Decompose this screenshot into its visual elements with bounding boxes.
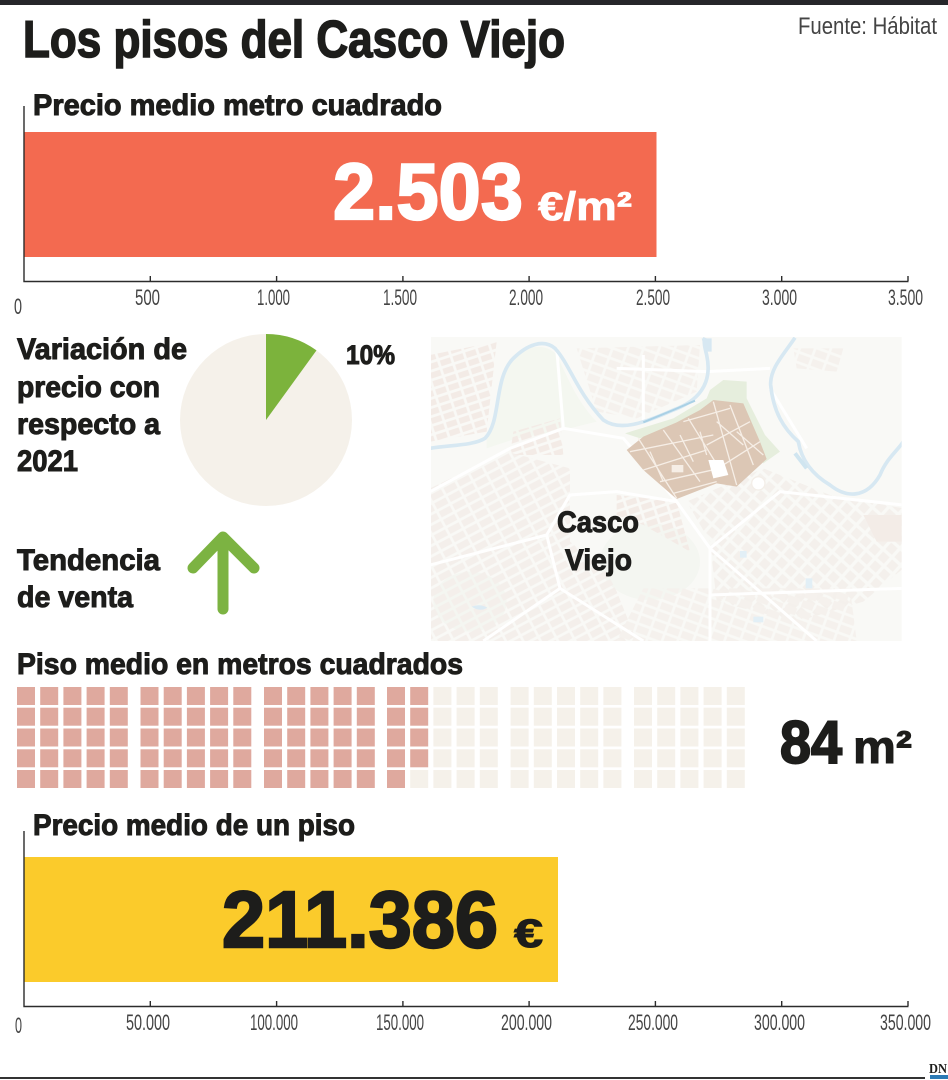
panel: map of Casco Viejo bbox=[430, 335, 903, 643]
green areas bbox=[487, 347, 597, 448]
map bbox=[430, 335, 903, 643]
bar: 211.386 euros: 211.386 bbox=[222, 875, 498, 964]
axis: price per square metre: 0 bbox=[14, 294, 22, 319]
old town streets bbox=[630, 402, 763, 498]
axis: average flat price bbox=[15, 831, 931, 1038]
heading: average flat size: Piso medio en metros cuadrados bbox=[17, 648, 463, 681]
heading: average flat price: Precio medio de un piso bbox=[33, 809, 355, 842]
panel: price variation bbox=[17, 333, 395, 506]
axis: price per square metre: 1.000 bbox=[257, 285, 290, 310]
axis: average flat price: 250.000 bbox=[628, 1010, 678, 1035]
title: Los pisos del Casco Viejo bbox=[23, 11, 565, 69]
white roads bbox=[430, 348, 903, 641]
heading: price per square metre: Precio medio metro cuadrado bbox=[33, 89, 442, 122]
pie label: 10% bbox=[346, 340, 395, 370]
map label bbox=[557, 506, 639, 577]
bar: 211.386 euros: € bbox=[514, 912, 543, 956]
value: 84 square metres bbox=[780, 709, 912, 776]
text: price variation with respect to 2021: precio con bbox=[17, 371, 160, 404]
axis: price per square metre: 1.500 bbox=[383, 285, 417, 310]
axis: average flat price: 0 bbox=[15, 1013, 22, 1038]
footer rule bbox=[0, 1077, 925, 1079]
value: 84 square metres: m² bbox=[853, 721, 912, 773]
axis: average flat price: 300.000 bbox=[754, 1010, 805, 1035]
waffle chart: 84 of 150 squares bbox=[17, 687, 745, 788]
panel: price per square metre bbox=[14, 89, 923, 319]
axis: price per square metre: 3.500 bbox=[888, 285, 923, 310]
map label: Viejo bbox=[565, 544, 632, 577]
pie chart: 10 percent bbox=[180, 334, 352, 506]
text: sales trend bbox=[17, 544, 160, 614]
axis: average flat price: 50.000 bbox=[126, 1010, 170, 1035]
axis: price per square metre: 500 bbox=[135, 285, 160, 310]
text: price variation with respect to 2021 bbox=[17, 333, 187, 478]
value: 84 square metres: 84 bbox=[780, 709, 843, 776]
text: price variation with respect to 2021: respecto a bbox=[17, 408, 160, 441]
rivers bbox=[430, 338, 903, 494]
bar: 2.503 euros per square metre: 2.503 bbox=[333, 147, 523, 236]
old town squares bbox=[708, 460, 728, 478]
text: sales trend: de venta bbox=[17, 581, 133, 614]
bar: 2.503 euros per square metre bbox=[24, 132, 656, 257]
old town bbox=[627, 400, 767, 499]
bar: 211.386 euros bbox=[24, 857, 558, 982]
text: price variation with respect to 2021: 2021 bbox=[17, 445, 78, 478]
panel: average flat in square metres bbox=[17, 648, 912, 788]
panel: sales trend bbox=[17, 537, 254, 614]
axis: price per square metre bbox=[14, 106, 923, 319]
text: price variation with respect to 2021: Variación de bbox=[17, 333, 187, 366]
axis: price per square metre: 2.500 bbox=[636, 285, 670, 310]
bar: 2.503 euros per square metre: €/m² bbox=[538, 185, 632, 229]
ponds bbox=[472, 605, 487, 610]
axis: price per square metre: 3.000 bbox=[762, 285, 797, 310]
top border bbox=[0, 0, 948, 5]
panel: average flat price bbox=[15, 809, 931, 1038]
icon: up arrow bbox=[193, 537, 254, 609]
text: sales trend: Tendencia bbox=[17, 544, 160, 577]
axis: average flat price: 200.000 bbox=[501, 1010, 552, 1035]
green rim of the old town bbox=[625, 380, 780, 463]
axis: average flat price: 150.000 bbox=[376, 1010, 424, 1035]
map label: Casco bbox=[557, 506, 639, 539]
axis: average flat price: 100.000 bbox=[250, 1010, 298, 1035]
pale city blocks bbox=[687, 468, 903, 622]
axis: price per square metre: 2.000 bbox=[509, 285, 543, 310]
